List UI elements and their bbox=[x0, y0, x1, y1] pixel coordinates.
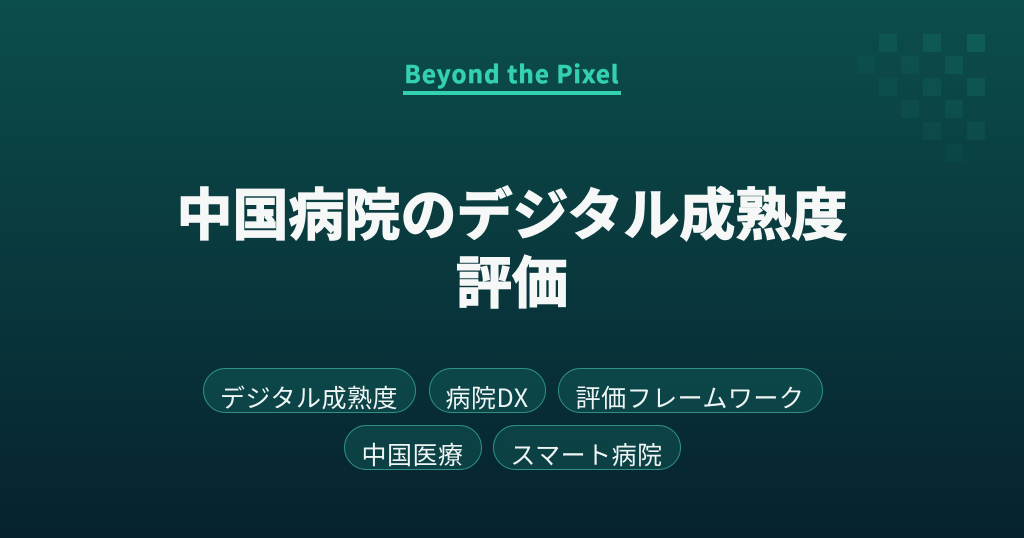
title bbox=[177, 171, 848, 320]
tag group bbox=[203, 368, 823, 472]
tag: 病院DX: 病院DX bbox=[445, 379, 529, 415]
tag: デジタル成熟度 bbox=[203, 368, 416, 413]
tag: 評価フレームワーク: 評価フレームワーク bbox=[576, 379, 804, 415]
brand label with underline: Beyond the Pixel bbox=[404, 55, 620, 90]
tag: 評価フレームワーク bbox=[558, 368, 823, 413]
tag: スマート病院: スマート病院 bbox=[510, 436, 663, 472]
tag: デジタル成熟度: デジタル成熟度 bbox=[220, 379, 398, 415]
tag: 中国医療: 中国医療 bbox=[361, 436, 464, 472]
tag: スマート病院 bbox=[493, 425, 681, 470]
decorative pixel grid bbox=[879, 34, 985, 140]
tag: 病院DX bbox=[429, 368, 546, 413]
title: 評価 bbox=[456, 239, 568, 320]
tag: 中国医療 bbox=[344, 425, 482, 470]
title: 中国病院のデジタル成熟度 bbox=[177, 171, 847, 252]
